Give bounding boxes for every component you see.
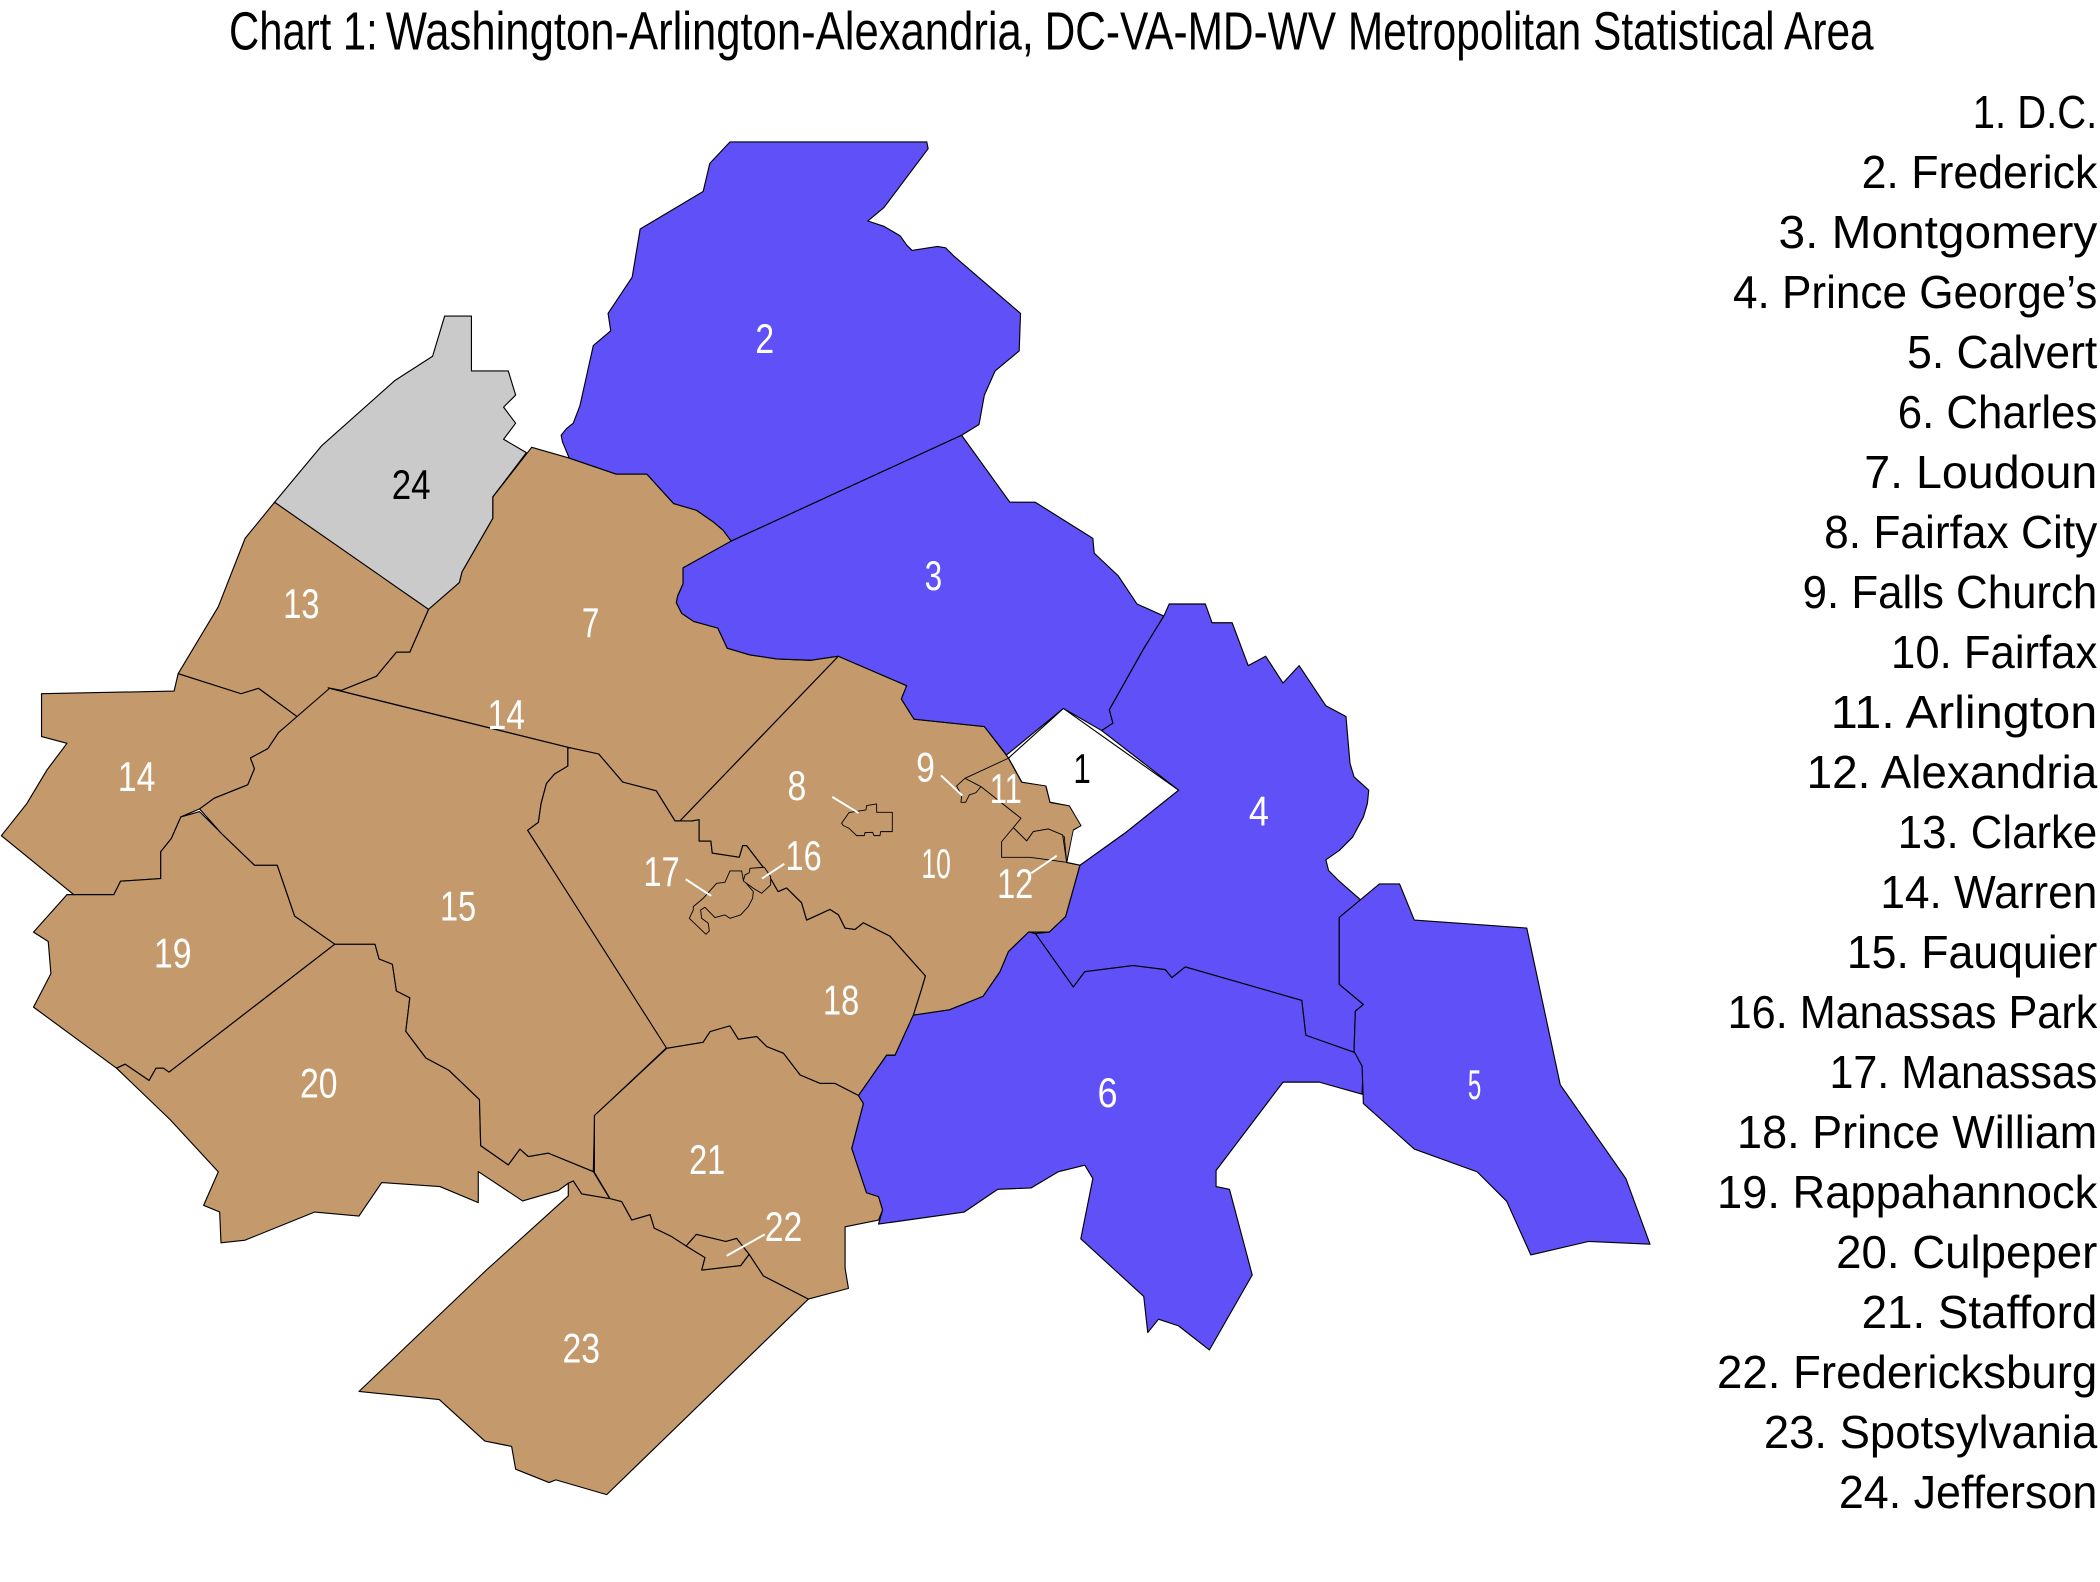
map number labels: 6	[1098, 1069, 1118, 1116]
map number labels: 12	[997, 860, 1033, 907]
county: Warren	[1, 674, 299, 895]
map number labels: 16	[785, 832, 822, 879]
county: Montgomery	[676, 435, 1164, 755]
county: Rappahannock	[34, 812, 335, 1081]
map number labels: 9	[916, 743, 935, 790]
map number labels: 1	[1073, 745, 1091, 792]
county: D.C.	[1008, 708, 1179, 865]
county: Jefferson	[275, 316, 526, 612]
map number labels: 18	[823, 976, 859, 1023]
leader lines	[686, 775, 1057, 1256]
inner jurisdictions	[689, 758, 1081, 934]
county: Stafford	[594, 1026, 883, 1299]
map number labels: 5	[1468, 1061, 1481, 1108]
legend: 22. Fredericksburg	[1717, 1346, 2097, 1398]
legend: 7. Loudoun	[1864, 446, 2097, 498]
title	[229, 3, 1874, 62]
map number labels: 21	[689, 1136, 725, 1183]
legend: 12. Alexandria	[1807, 746, 2098, 798]
county: Charles	[852, 932, 1363, 1350]
county: Fauquier	[200, 688, 667, 1172]
map number labels: 17	[644, 848, 680, 895]
map number labels: 11	[990, 765, 1022, 812]
map number labels: 10	[921, 840, 951, 887]
county: Culpeper	[117, 944, 610, 1243]
county: Clarke	[178, 502, 429, 718]
map number labels: 19	[154, 930, 192, 977]
map number labels: 14	[488, 691, 525, 738]
legend: 2. Frederick	[1862, 146, 2098, 198]
map number labels: 3	[925, 552, 942, 599]
county: Alexandria	[1002, 828, 1067, 862]
county: Fairfax City	[842, 804, 892, 836]
county: Calvert	[1339, 884, 1650, 1255]
county: Frederick	[561, 142, 1021, 541]
county: Falls Church	[957, 778, 981, 802]
map number labels: 7	[582, 599, 599, 646]
map number labels	[118, 315, 1481, 1372]
legend: 5. Calvert	[1907, 326, 2097, 378]
legend: 19. Rappahannock	[1717, 1166, 2098, 1218]
county: Prince William	[528, 747, 925, 1096]
county: Manassas	[689, 871, 753, 934]
legend	[1717, 86, 2098, 1518]
title: DC-VA-MD-WV Metropolitan Statistical Area	[1045, 3, 1874, 62]
legend: 18. Prince William	[1737, 1106, 2097, 1158]
county: Loudoun	[328, 447, 838, 821]
legend: 15. Fauquier	[1847, 926, 2097, 978]
legend: 21. Stafford	[1862, 1286, 2097, 1338]
map number labels: 8	[788, 762, 806, 809]
county: Fredericksburg	[686, 1234, 749, 1270]
legend: 20. Culpeper	[1836, 1226, 2097, 1278]
title: Chart 1:	[229, 3, 378, 62]
title: Washington-Arlington-Alexandria,	[386, 3, 1034, 62]
legend: 3. Montgomery	[1779, 206, 2097, 258]
county: Fairfax	[680, 656, 1081, 1015]
map number labels: 14	[118, 753, 155, 800]
map number labels: 13	[283, 580, 319, 627]
map number labels: 2	[755, 315, 774, 362]
map number labels: 22	[765, 1203, 802, 1250]
legend: 23. Spotsylvania	[1764, 1406, 2098, 1458]
county: Manassas Park	[743, 867, 771, 893]
map number labels: 15	[440, 883, 476, 930]
map number labels: 20	[300, 1060, 338, 1107]
county: Arlington	[965, 758, 1081, 862]
legend: 24. Jefferson	[1839, 1466, 2097, 1518]
map number labels: 23	[563, 1325, 600, 1372]
county: Spotsylvania	[359, 1181, 808, 1495]
legend: 11. Arlington	[1831, 686, 2097, 738]
map number labels: 4	[1249, 788, 1269, 835]
map of counties	[1, 142, 1650, 1495]
map number labels: 24	[392, 461, 431, 508]
county: Prince George's	[1035, 604, 1369, 1054]
